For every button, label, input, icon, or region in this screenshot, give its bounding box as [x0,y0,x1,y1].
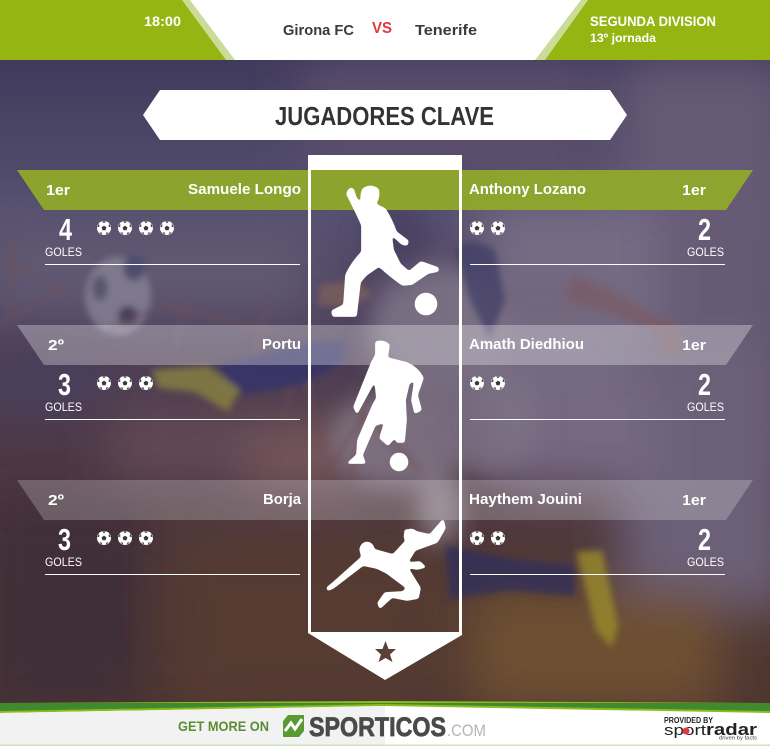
versus: VS [372,20,392,37]
title plaque [143,90,627,140]
goals number: 2 [698,522,711,557]
goals label: GOLES [45,245,82,259]
row 1 banner [17,170,753,210]
icon: player dribbling [348,341,423,470]
goal balls [97,376,153,390]
rank: 1er [682,337,706,354]
goals number: 3 [58,367,71,402]
panel: row 2 left player [45,336,301,420]
name: Amath Diedhiou [469,336,584,353]
goal balls [470,221,505,235]
icon: star [375,641,396,662]
panel: row 3 left player [45,491,302,575]
icon: sporticos logo [283,715,304,737]
goals label: GOLES [45,555,82,569]
tagline: driven by facts [719,736,758,742]
rank: 1er [682,492,706,509]
row 2 banner [17,325,753,365]
goals label: GOLES [687,245,724,259]
panel: row 1 right player [469,181,725,265]
competition: SEGUNDA DIVISION [590,13,716,29]
name: Portu [262,336,301,353]
goals number: 2 [698,367,711,402]
goals number: 4 [59,212,73,247]
kick-off time: 18:00 [144,13,181,29]
sportradar logo: radar [706,720,757,739]
away team: Tenerife [415,22,477,39]
goal balls [97,221,174,235]
sportradar logo: sport [664,722,707,739]
call to action: GET MORE ON [178,718,269,734]
row 3 banner [17,480,753,520]
goal balls [470,531,505,545]
name: Haythem Jouini [469,491,582,508]
sporticos wordmark: SPORTICOS [309,712,446,742]
rank: 2º [48,337,65,354]
name: Anthony Lozano [469,181,586,198]
goals number: 2 [698,212,711,247]
icon: player kicking [332,186,438,316]
home team: Girona FC [283,22,354,39]
goal balls [97,531,153,545]
footer [0,701,770,746]
panel: row 2 right player [469,336,725,420]
goals label: GOLES [687,400,724,414]
rank: 1er [46,182,70,199]
goals label: GOLES [687,555,724,569]
matchday: 13º jornada [590,31,656,45]
provided by: PROVIDED BY [664,716,714,725]
goals number: 3 [58,522,71,557]
rank: 1er [682,182,706,199]
panel: row 3 right player [469,491,725,575]
rank: 2º [48,492,65,509]
panel: row 1 left player [45,181,301,265]
sportradar logo [664,720,757,739]
.com: .COM [447,721,486,740]
title plaque: JUGADORES CLAVE [275,101,494,131]
goals label: GOLES [45,400,82,414]
header bar [0,0,770,60]
goal balls [470,376,505,390]
name: Borja [263,491,302,508]
icon: player overhead kick [327,520,445,608]
center frame [308,155,462,680]
name: Samuele Longo [188,181,301,198]
